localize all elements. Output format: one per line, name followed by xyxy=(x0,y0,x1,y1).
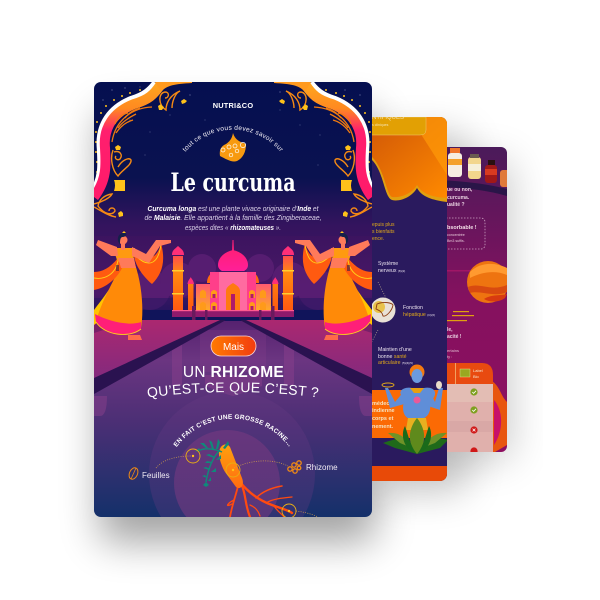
curl middle xyxy=(112,150,131,176)
lines: yellow strokes xyxy=(447,311,474,321)
ornament: yellow square xyxy=(114,180,125,191)
brand: NUTRI&CO: NUTRI&CO xyxy=(213,101,253,110)
label: liver function xyxy=(403,305,435,318)
table: label bio comparison: Label xyxy=(473,368,483,373)
ornament: left half of arch xyxy=(94,82,192,217)
panel: third page, back: ty : xyxy=(447,354,452,359)
label: joint health: Maintien d’une xyxy=(378,347,412,353)
illustration: Taj Mahal xyxy=(172,240,294,326)
illustration: left dancer xyxy=(94,231,171,340)
label: joint health: bonne santé xyxy=(378,354,407,360)
illustration: root with leaves xyxy=(195,439,292,517)
icon: orange planet xyxy=(467,261,509,303)
band: orange text band: corps et xyxy=(372,416,394,422)
scene: sky and clouds xyxy=(94,254,372,321)
label: Rhizome: Rhizome xyxy=(306,463,338,472)
text: efficacité xyxy=(447,327,461,338)
text: benefits intro: ence. xyxy=(372,236,384,242)
panel: main page xyxy=(94,82,372,517)
stars xyxy=(102,87,360,165)
icon: liver circle xyxy=(372,282,396,342)
text: benefits intro: s bienfaits xyxy=(372,229,395,235)
illustration: right dancer xyxy=(295,231,372,340)
text: question xyxy=(447,188,472,206)
label: joint health xyxy=(378,347,413,366)
band: orange footer xyxy=(372,466,447,481)
text: question: ualité ? xyxy=(447,202,465,208)
header: orange scalloped top: s cliniques xyxy=(372,123,389,127)
label: nervous system: Système xyxy=(378,261,398,267)
table: label bio comparison: Bio xyxy=(473,374,480,379)
arc text: intro line: tout ce que vous devez savoir sur xyxy=(182,125,283,152)
callout: dashed box: bsorbable ! xyxy=(447,225,477,231)
pink blob behind table xyxy=(493,382,507,452)
header: orange scalloped top xyxy=(372,117,447,202)
panel: third page, back: ertains xyxy=(447,348,459,353)
button: Mais: Mais xyxy=(223,342,244,353)
text block: introduction: espèces dites « rhizomateuses ». xyxy=(185,223,281,232)
curl lower xyxy=(94,194,116,217)
dotted callout lines xyxy=(156,456,318,517)
shadows of the pages xyxy=(100,112,512,542)
text block: introduction: Curcuma longa est une plante vivace originaire d’Inde et xyxy=(148,204,319,213)
callout: dashed box xyxy=(447,218,486,250)
rings behind root xyxy=(149,391,315,557)
infographic: stacked booklet of three pages xyxy=(75,82,530,567)
illustration: blue deity on lotus xyxy=(382,364,448,454)
fern xyxy=(112,107,152,142)
text: question: curcuma. xyxy=(447,195,470,201)
panel: third page, back xyxy=(447,147,507,452)
label: liver function: Fonction xyxy=(403,305,423,311)
heading: un rhizome: UN RHIZOME xyxy=(183,364,284,381)
ornament: right half of arch xyxy=(274,82,372,217)
text: benefits intro xyxy=(372,222,394,240)
band: orange text band: nement. xyxy=(372,424,394,430)
band: orange text band xyxy=(372,390,447,438)
label: nervous system: nerveux (8)(2) xyxy=(378,268,405,274)
callout: dashed box: Bm3 suffis. xyxy=(447,239,465,243)
text: question: ue ou non, xyxy=(447,187,473,193)
band: orange text band: médecine xyxy=(372,401,397,407)
text block: introduction xyxy=(144,204,322,232)
band: orange text band: indienne xyxy=(372,408,395,414)
label: Feuilles xyxy=(127,466,170,481)
text: efficacité: acité ! xyxy=(447,334,462,340)
marker: rhizome xyxy=(226,463,240,477)
icon: supplement bottles on a shelf xyxy=(447,148,507,196)
text: efficacité: le, xyxy=(447,327,453,333)
heading: qu'est-ce que c'est: QU’EST-CE QUE C’EST ? xyxy=(148,382,318,400)
button: Mais xyxy=(211,336,256,356)
marker: roots xyxy=(282,504,296,518)
label: Rhizome xyxy=(288,461,338,473)
curl upper xyxy=(160,91,180,110)
panel: second page, middle xyxy=(372,117,447,481)
scene: reflection pool and ground xyxy=(94,320,372,416)
text: benefits intro: epuis plus xyxy=(372,222,395,228)
callout: dashed box: concentrée xyxy=(447,233,465,237)
table: label bio comparison xyxy=(447,363,493,452)
title: Le curcuma xyxy=(170,168,296,197)
marker: leaves xyxy=(186,449,200,463)
header: orange scalloped top: NTIFIQUES xyxy=(372,115,404,121)
arc text: en fait: EN FAIT C’EST UNE GROSSE RACINE… xyxy=(173,414,290,447)
label: liver function: hépatique (C)(6) xyxy=(403,312,435,318)
text block: introduction: de Malaisie. Elle appartient à la famille des Zingiberaceae, xyxy=(144,213,322,222)
icon: turmeric root xyxy=(220,133,246,162)
label: Feuilles: Feuilles xyxy=(142,471,170,480)
label: joint health: articulaire (5)(4)(5) xyxy=(378,360,413,366)
label: nervous system xyxy=(378,261,406,272)
